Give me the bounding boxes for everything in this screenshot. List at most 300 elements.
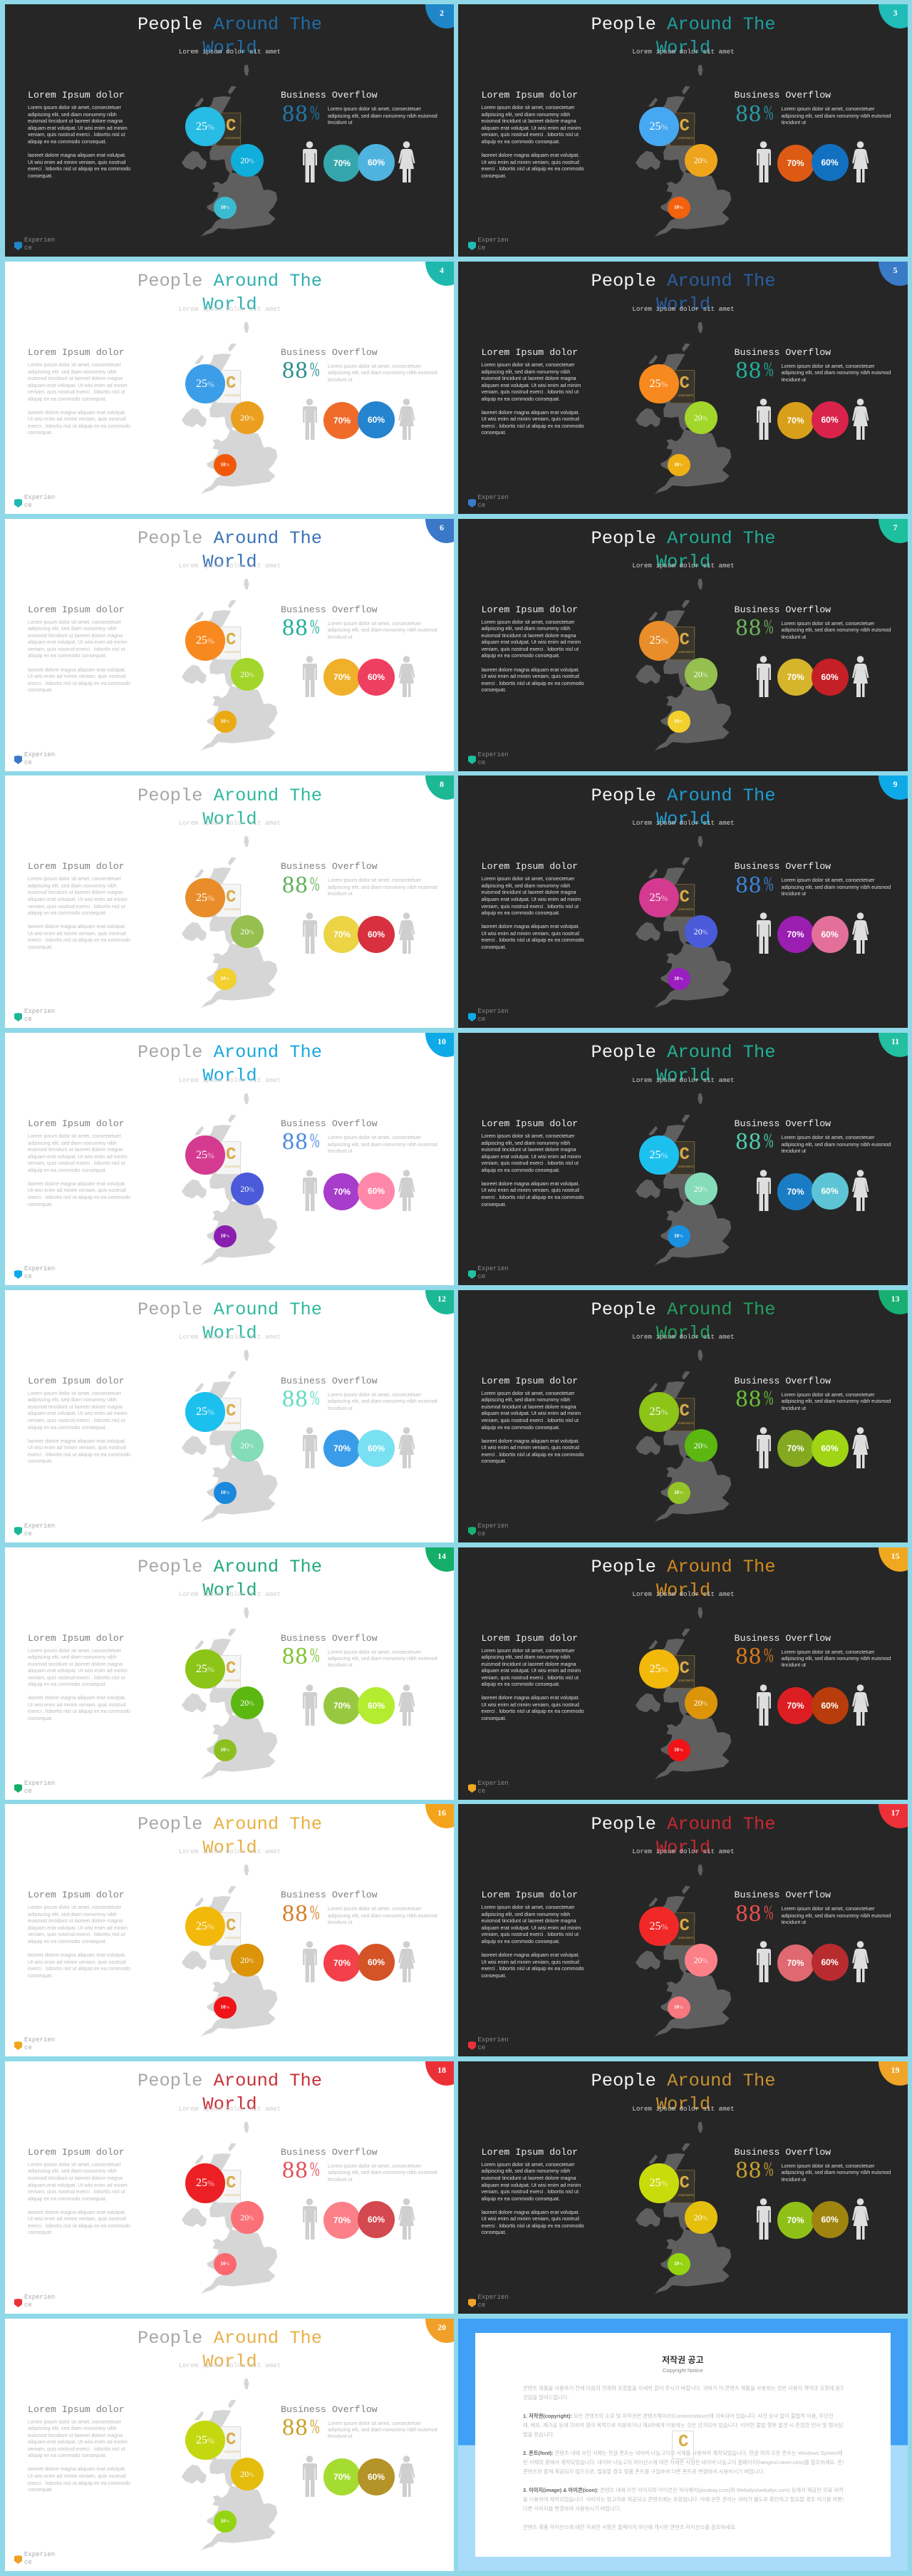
circle 10%: [214, 1482, 237, 1504]
stat text: tincidunt ut: [328, 1661, 353, 1668]
logo: ce: [477, 244, 485, 252]
circle 10%: 10%: [221, 1747, 229, 1753]
panel: slide 12: [4, 1290, 454, 1542]
stat: %: [310, 1386, 319, 1409]
logo: [14, 2294, 64, 2311]
notice body text: 것임을 알려드립니다.: [523, 2394, 569, 2401]
text block: veniam, quis nostrud exerci . lobortis nisl ut: [482, 1160, 579, 1166]
heading: Lorem Ipsum dolor: [28, 90, 125, 101]
stat text: tincidunt ut: [781, 1661, 806, 1668]
heading: Lorem Ipsum dolor: [482, 604, 578, 615]
stat text: tincidunt ut: [328, 890, 353, 897]
text block: Ut wisi enim ad minim veniam, quis nostrud: [482, 930, 579, 937]
heading: Business Overflow: [734, 604, 831, 615]
logo: Experien: [477, 237, 509, 244]
title: World: [656, 38, 710, 58]
panel: copyright notice: [458, 2319, 908, 2571]
circle 10%: 10%: [674, 718, 683, 724]
text block: laoreet dolore magna aliquam erat volutpat.: [28, 2209, 126, 2215]
text block: veniam, quis nostrud exerci . lobortis nisl ut: [28, 1160, 125, 1166]
circle 70%: [777, 2202, 814, 2239]
watermark: [670, 113, 694, 146]
page badge: [425, 751, 467, 800]
text block: aliquip ex ea commodo consequat.: [28, 910, 106, 916]
logo: [467, 751, 517, 768]
text block: consequat.: [482, 172, 506, 179]
icon: woman: [398, 398, 415, 440]
text block: veniam, quis nostrud exerci . lobortis nisl ut: [28, 2446, 125, 2452]
watermark: C: [678, 2433, 688, 2452]
text block: consequat.: [482, 2229, 506, 2235]
text block: euismod tincidunt ut laoreet dolore magna: [28, 1403, 123, 1410]
title: World: [202, 2351, 257, 2372]
text block: Lorem ipsum dolor sit amet, consectetuer: [482, 1390, 575, 1396]
circle 60%: [811, 401, 848, 438]
text block: euismod tincidunt ut laoreet dolore magna: [482, 632, 576, 639]
title: [6, 1041, 455, 1088]
panel: slide 10: [4, 1033, 454, 1285]
stat: [282, 1642, 322, 1671]
UK map: [617, 578, 745, 771]
stat: %: [310, 615, 319, 638]
title: [138, 14, 322, 58]
circle 70%: 70%: [333, 1701, 351, 1711]
logo: [467, 1779, 517, 1796]
text block: veniam, quis nostrud exerci . lobortis nisl ut: [28, 388, 125, 395]
watermark: C: [226, 1402, 236, 1421]
circle 20%: [231, 658, 264, 691]
stat: %: [764, 1386, 773, 1409]
text block: laoreet dolore magna aliquam erat volutpat.: [482, 2209, 579, 2215]
logo: [14, 1779, 64, 1796]
page badge: 17: [891, 1808, 899, 1818]
logo: Experien: [24, 494, 55, 501]
text block: euismod tincidunt ut laoreet dolore magna: [482, 1661, 576, 1667]
title: [459, 784, 908, 831]
circle 25%: [185, 2421, 225, 2460]
circle 20%: [231, 2458, 264, 2490]
watermark: [216, 1398, 241, 1431]
text block: aliquip ex ea commodo consequat.: [482, 1681, 560, 1687]
heading: Business Overflow: [281, 604, 378, 615]
stat text: [328, 877, 437, 897]
watermark: C: [226, 117, 236, 136]
circle 20%: [231, 401, 264, 434]
page badge: [879, 0, 912, 29]
circle 25%: 25%: [196, 1149, 214, 1161]
stat text: [328, 1391, 437, 1411]
heading: Lorem Ipsum dolor: [28, 1376, 125, 1386]
page badge: [879, 1523, 912, 1571]
circle 25%: [185, 1907, 225, 1946]
logo: ce: [24, 1788, 32, 1795]
subtitle: Lorem ipsum dolor sit amet: [179, 562, 281, 570]
watermark: CONTENTS: [678, 1421, 694, 1425]
watermark: CONTENTS: [224, 1679, 240, 1682]
text block: exerci . lobortis nisl ut aliquip ex ea commodo: [28, 1451, 130, 1458]
icon: man: [303, 656, 317, 697]
watermark: [670, 1398, 694, 1431]
stat: 88: [735, 1128, 762, 1155]
UK map: [182, 322, 278, 495]
stat text: Lorem ipsum dolor sit amet, consectetuer: [781, 1905, 875, 1912]
icon: man: [755, 1684, 771, 1725]
circle 20%: 20%: [694, 1441, 708, 1451]
stat: 88: [735, 2157, 762, 2183]
stat: %: [764, 358, 773, 381]
circle 20%: 20%: [240, 2212, 254, 2222]
UK map: [617, 2121, 745, 2314]
watermark: CONTENTS: [224, 650, 240, 654]
page badge: 18: [437, 2065, 446, 2075]
heading: Business Overflow: [734, 1890, 831, 1900]
circle 25%: [185, 2163, 225, 2203]
text block: Lorem ipsum dolor sit amet, consectetuer: [482, 875, 575, 882]
title: People Around The: [138, 1299, 322, 1320]
circle 70%: 70%: [787, 1187, 804, 1197]
watermark: CONTENTS: [678, 1936, 694, 1939]
icon: man: [757, 398, 771, 440]
circle 60%: 60%: [821, 1701, 839, 1711]
notice body text: 콘텐츠와 함께 제공되지 않으므로, 필요할 경우 정품 폰트를 구입하여 다른 폰트로 변경하여 사용하시기 바랍니다.: [523, 2468, 765, 2475]
text block: laoreet dolore magna aliquam erat volutpat.: [28, 923, 126, 929]
circle 10%: 10%: [674, 1747, 683, 1753]
circle 25%: 25%: [650, 2177, 668, 2189]
text block: euismod tincidunt ut laoreet dolore magna: [482, 118, 576, 124]
circle 25%: 25%: [196, 634, 214, 646]
heading: Lorem Ipsum dolor: [482, 1890, 578, 1900]
watermark: [670, 2170, 694, 2203]
heading: Lorem Ipsum dolor: [482, 861, 578, 872]
icon: woman: [398, 1170, 415, 1211]
text block: aliquip ex ea commodo consequat.: [482, 396, 560, 402]
logo: [14, 751, 55, 766]
icon: man: [303, 141, 317, 182]
circle 70%: 70%: [787, 416, 804, 426]
icon: man: [757, 141, 771, 182]
circle 20%: [231, 2201, 264, 2234]
logo: Experien: [477, 751, 509, 758]
circle 20%: [231, 915, 264, 948]
circle 25%: [185, 1135, 225, 1175]
text block: laoreet dolore magna aliquam erat volutpat.: [482, 152, 579, 158]
stat text: tincidunt ut: [781, 376, 806, 383]
circle 60%: 60%: [368, 415, 385, 425]
notice body text: 콘텐츠 제품 라이선스에 대한 자세한 사항은 홈페이지 하단에 게시된 콘텐츠 라이선스를 참조하세요.: [523, 2524, 737, 2530]
subtitle: Lorem ipsum dolor sit amet: [632, 1848, 735, 1855]
watermark: CONTENTS: [224, 2450, 240, 2453]
text block: [482, 619, 584, 694]
stat: %: [310, 872, 319, 895]
panel: slide 13: [458, 1290, 908, 1542]
text block: euismod tincidunt ut laoreet dolore magna: [28, 889, 123, 895]
circle 60%: 60%: [821, 2215, 839, 2225]
UK map: [636, 322, 731, 495]
stat text: [781, 1134, 891, 1154]
icon: woman: [851, 1684, 869, 1725]
stat: %: [310, 2415, 319, 2438]
text block: exerci . lobortis nisl ut aliquip ex ea commodo: [482, 1965, 584, 1972]
text block: Ut wisi enim ad minim veniam, quis nostrud: [482, 673, 579, 679]
circle 10%: 10%: [221, 718, 229, 724]
heading: Business Overflow: [281, 347, 378, 358]
circle 25%: 25%: [650, 120, 668, 133]
title: People Around The: [138, 2071, 322, 2091]
text block: Lorem ipsum dolor sit amet, consectetuer: [28, 361, 121, 368]
text block: Ut wisi enim ad minim veniam, quis nostrud: [28, 1959, 125, 1965]
icon: woman: [398, 912, 415, 954]
logo: Experien: [24, 1523, 55, 1530]
watermark: C: [226, 2174, 236, 2193]
watermark: [672, 2431, 694, 2459]
stat text: adipiscing elit, sed diam nonummy nibh euismod: [781, 1398, 891, 1404]
text block: aliquam erat volutpat. Ut wisi enim ad minim: [28, 2182, 128, 2188]
heading: Lorem Ipsum dolor: [28, 1118, 125, 1129]
text block: aliquip ex ea commodo consequat.: [482, 652, 560, 659]
circle 20%: [684, 915, 717, 948]
text block: adipiscing elit, sed diam nonummy nibh: [28, 1911, 117, 1917]
watermark: C: [680, 1659, 690, 1679]
stat: [282, 871, 322, 900]
stat text: Lorem ipsum dolor sit amet, consectetuer: [328, 363, 421, 369]
stat text: [781, 363, 891, 383]
heading: Business Overflow: [734, 90, 831, 101]
title: People Around The: [591, 528, 776, 549]
notice subtitle: Copyright Notice: [663, 2367, 703, 2374]
circle 70%: 70%: [333, 416, 351, 426]
text block: [482, 361, 584, 436]
watermark: C: [226, 1659, 236, 1679]
text block: Ut wisi enim ad minim veniam, quis nostrud: [482, 2215, 579, 2222]
title: [591, 271, 776, 315]
circle 60%: [358, 2458, 395, 2495]
icon: woman: [851, 1941, 869, 1982]
circle 20%: [684, 144, 717, 177]
text block: aliquam erat volutpat. Ut wisi enim ad minim: [28, 125, 128, 131]
UK map: [617, 835, 745, 1028]
logo: Experien: [24, 2551, 55, 2558]
UK map: [164, 1864, 292, 2056]
circle 60%: 60%: [368, 158, 385, 168]
text block: [28, 875, 130, 950]
circle 10%: [214, 1225, 237, 1247]
title: [459, 1298, 908, 1345]
circle 10%: [667, 968, 690, 990]
circle 70%: 70%: [333, 1958, 351, 1968]
page badge: 14: [437, 1551, 446, 1561]
stat text: [328, 1648, 437, 1669]
stat text: adipiscing elit, sed diam nonummy nibh euismod: [781, 1140, 891, 1148]
heading: Lorem Ipsum dolor: [482, 2147, 578, 2158]
text block: exerci . lobortis nisl ut aliquip ex ea commodo: [28, 1708, 130, 1714]
logo: ce: [24, 2302, 32, 2309]
page badge: [879, 1009, 912, 1057]
text block: euismod tincidunt ut laoreet dolore magna: [482, 889, 576, 895]
watermark: [670, 627, 694, 660]
text block: consequat.: [28, 1715, 53, 1721]
text block: exerci . lobortis nisl ut aliquip ex ea commodo: [28, 1194, 130, 1200]
circle 10%: [667, 453, 690, 476]
subtitle: Lorem ipsum dolor sit amet: [179, 2105, 281, 2113]
text block: [28, 361, 130, 436]
title: People Around The: [591, 2071, 776, 2091]
subtitle: Lorem ipsum dolor sit amet: [179, 1848, 281, 1855]
page badge: [425, 1780, 467, 1828]
circle 20%: 20%: [240, 669, 254, 679]
circle 25%: 25%: [650, 1406, 668, 1418]
circle 25%: 25%: [196, 892, 214, 904]
circle 60%: 60%: [368, 1701, 385, 1711]
text block: euismod tincidunt ut laoreet dolore magna: [482, 375, 576, 381]
title: People Around The: [138, 1814, 322, 1835]
page badge: [425, 0, 467, 29]
circle 10%: [667, 1739, 690, 1761]
circle 25%: [638, 621, 678, 661]
page badge: 11: [891, 1036, 899, 1046]
text block: Ut wisi enim ad minim veniam, quis nostrud: [28, 2215, 125, 2222]
text block: aliquip ex ea commodo consequat.: [482, 2195, 560, 2202]
logo: Experien: [477, 1523, 509, 1530]
text block: Ut wisi enim ad minim veniam, quis nostrud: [482, 1959, 579, 1965]
watermark: [670, 1141, 694, 1175]
title: People Around The: [138, 1557, 322, 1577]
stat text: adipiscing elit, sed diam nonummy nibh euismod: [328, 2169, 437, 2175]
title: People Around The: [591, 271, 776, 292]
stat text: Lorem ipsum dolor sit amet, consectetuer: [781, 1648, 875, 1655]
text block: adipiscing elit, sed diam nonummy nibh: [28, 111, 117, 118]
stat: [735, 1128, 775, 1156]
title: [6, 1555, 455, 1602]
stat: %: [310, 2158, 319, 2181]
stat: %: [764, 872, 773, 895]
circle 10%: [667, 1997, 690, 2019]
stat text: Lorem ipsum dolor sit amet, consectetuer: [328, 877, 421, 883]
title: World: [202, 552, 257, 572]
stat text: adipiscing elit, sed diam nonummy nibh euismod: [781, 369, 891, 376]
stat text: [328, 1905, 437, 1925]
subtitle: Lorem ipsum dolor sit amet: [632, 1590, 735, 1598]
text block: veniam, quis nostrud exerci . lobortis nisl ut: [28, 646, 125, 652]
page badge: [425, 1009, 467, 1057]
watermark: C: [226, 2431, 236, 2450]
circle 25%: [638, 1392, 678, 1432]
title: [459, 1555, 908, 1602]
panel: slide 15: [458, 1547, 908, 1799]
logo: Experien: [24, 237, 55, 244]
circle 10%: [214, 1739, 237, 1761]
title: [459, 527, 908, 574]
heading: Business Overflow: [281, 1118, 378, 1129]
icon: man: [302, 1427, 317, 1468]
notice body text: 다른 이미지를 변경하여 사용하시기 바랍니다.: [523, 2505, 621, 2512]
title: People Around The: [138, 528, 322, 549]
text block: exerci . lobortis nisl ut aliquip ex ea commodo: [482, 2222, 584, 2229]
title: World: [202, 1580, 257, 1601]
text block: aliquip ex ea commodo consequat.: [28, 396, 106, 402]
stat text: adipiscing elit, sed diam nonummy nibh euismod: [328, 113, 437, 119]
watermark: C: [680, 888, 690, 907]
watermark: CONTENTS: [678, 1165, 694, 1168]
circle 70%: 70%: [787, 929, 804, 939]
stat text: [781, 1648, 891, 1669]
circle 25%: 25%: [650, 1149, 668, 1161]
watermark: CONTENTS: [224, 393, 240, 397]
UK map: [636, 64, 731, 237]
text block: adipiscing elit, sed diam nonummy nibh: [482, 1654, 570, 1660]
text block: Lorem ipsum dolor sit amet, consectetuer: [28, 104, 121, 110]
watermark: CONTENTS: [678, 2193, 694, 2197]
title: People Around The: [138, 14, 322, 35]
notice body text: 1. 저작권(copyright): 모든 콘텐츠의 소유 및 저작권은 콘텐츠웨이브(ContentsWave)에 귀속되어 있습니다. 사전 승낙 없이 불법적 이용, 무단전: [523, 2413, 834, 2419]
text block: Lorem ipsum dolor sit amet, consectetuer: [482, 1904, 575, 1910]
text block: consequat.: [28, 1201, 53, 1207]
page badge: 9: [893, 779, 898, 789]
text block: consequat.: [28, 944, 53, 950]
circle 70%: [323, 2202, 361, 2239]
watermark: CONTENTS: [678, 136, 694, 140]
circle 10%: 10%: [221, 1233, 229, 1239]
text block: laoreet dolore magna aliquam erat volutpat.: [28, 1438, 126, 1444]
circle 25%: [185, 878, 225, 917]
stat: [735, 614, 775, 642]
circle 60%: [811, 1944, 848, 1981]
text block: aliquam erat volutpat. Ut wisi enim ad minim: [28, 1410, 128, 1416]
title: People Around The: [591, 1299, 776, 1320]
panel: slide 9: [458, 776, 908, 1028]
stat: [735, 1385, 775, 1413]
text block: [28, 104, 130, 179]
heading: Business Overflow: [281, 1632, 378, 1644]
circle 10%: [667, 2253, 690, 2275]
icon: man: [302, 1684, 317, 1725]
watermark: [216, 2426, 241, 2460]
stat text: tincidunt ut: [781, 119, 806, 125]
UK map: [617, 1349, 745, 1542]
icon: man: [302, 912, 317, 954]
text block: exerci . lobortis nisl ut aliquip ex ea commodo: [482, 680, 584, 686]
watermark: CONTENTS: [678, 650, 694, 654]
title: People Around The: [591, 1042, 776, 1063]
stat: %: [310, 1644, 319, 1666]
page badge: 19: [891, 2065, 899, 2075]
stat text: [328, 1134, 437, 1154]
circle 70%: [323, 1430, 361, 1467]
stat: 88: [282, 2157, 309, 2183]
text block: [28, 619, 130, 693]
title: People Around The: [591, 14, 776, 35]
circle 20%: [231, 1944, 264, 1977]
text block: [482, 875, 584, 950]
circle 60%: 60%: [368, 1443, 385, 1453]
stat text: [781, 1905, 891, 1925]
logo: [14, 1008, 64, 1025]
text block: consequat.: [28, 2229, 53, 2235]
text block: euismod tincidunt ut laoreet dolore magna: [28, 1146, 123, 1153]
title: People Around The: [591, 1814, 776, 1835]
title: World: [202, 1838, 257, 1858]
circle 70%: 70%: [333, 1443, 351, 1453]
panel: slide 16: [4, 1804, 454, 2056]
logo: [468, 494, 509, 509]
stat: 88: [282, 872, 309, 898]
text block: exerci . lobortis nisl ut aliquip ex ea commodo: [28, 2480, 130, 2486]
text block: Lorem ipsum dolor sit amet, consectetuer: [28, 1904, 121, 1910]
stat: 88: [735, 614, 762, 641]
text block: veniam, quis nostrud exerci . lobortis nisl ut: [482, 1674, 579, 1681]
heading: Business Overflow: [734, 1118, 831, 1129]
circle 20%: 20%: [694, 413, 708, 423]
text block: consequat.: [482, 686, 506, 693]
